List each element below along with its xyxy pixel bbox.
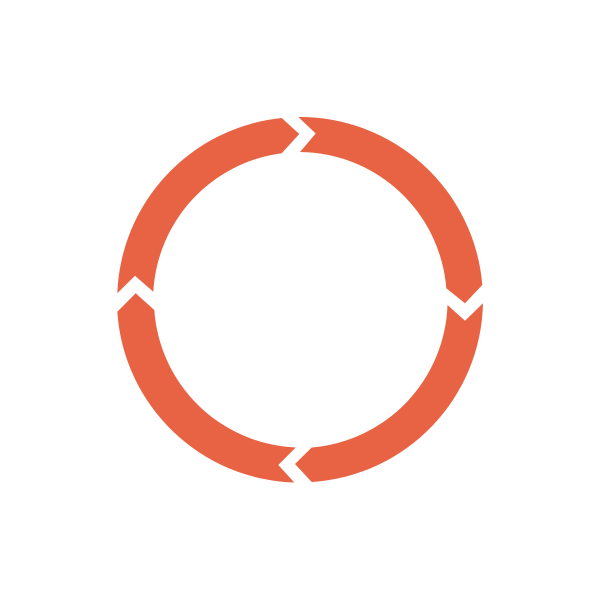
arrow: top-right arc pointing clockwise to the right — [298, 117, 482, 303]
arrow: bottom-left arc pointing clockwise to the left — [117, 293, 296, 482]
arrow: top-left arc pointing clockwise to the top — [117, 118, 299, 293]
arrow: bottom-right arc pointing clockwise to the bottom — [295, 303, 483, 482]
